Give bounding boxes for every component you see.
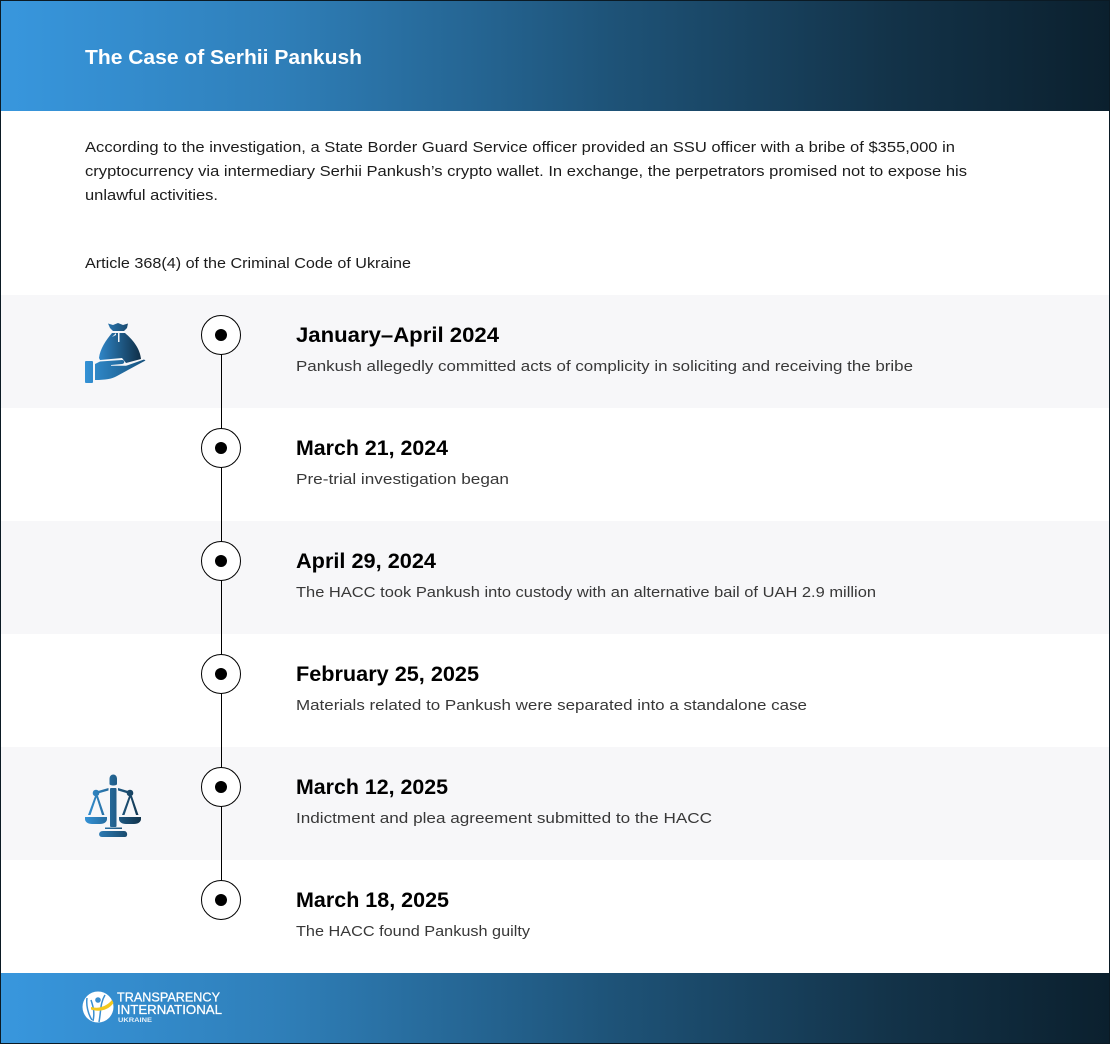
logo: Transparency International Ukraine: INTERNATIONAL [117, 1003, 222, 1017]
header band [0, 0, 1110, 111]
title: The Case of Serhii Pankush [85, 47, 362, 69]
event: March 12, 2025 [296, 776, 712, 827]
event: April 29, 2024: April 29, 2024 [296, 550, 436, 573]
icon: scales of justice [85, 774, 141, 837]
event: March 18, 2025: March 18, 2025 [296, 889, 449, 912]
event: April 29, 2024: The HACC took Pankush into custody with an alternative bail of UAH 2.9 million [296, 584, 876, 601]
event: March 21, 2024: March 21, 2024 [296, 437, 448, 460]
event: March 18, 2025: The HACC found Pankush guilty [296, 923, 531, 940]
event: January–April 2024: Pankush allegedly committed acts of complicity in soliciting and receiving the bribe [296, 358, 913, 375]
intro paragraph [85, 139, 967, 204]
event: February 25, 2025: February 25, 2025 [296, 663, 479, 686]
event: March 21, 2024: Pre-trial investigation began [296, 471, 509, 488]
intro paragraph: According to the investigation, a State Border Guard Service officer provided an SSU officer with a bribe of $355,000 in [85, 139, 955, 156]
timeline markers [202, 316, 240, 920]
event: March 12, 2025: March 12, 2025 [296, 776, 448, 799]
intro paragraph: unlawful activities. [85, 187, 218, 204]
event: March 12, 2025: Indictment and plea agreement submitted to the HACC [296, 810, 712, 827]
event: February 25, 2025: Materials related to Pankush were separated into a standalone case [296, 697, 807, 714]
logo: Transparency International Ukraine: TRANSPARENCY [117, 990, 221, 1004]
event: January–April 2024: January–April 2024 [296, 324, 499, 347]
event: April 29, 2024 [296, 550, 876, 601]
logo: Transparency International Ukraine [82, 990, 222, 1024]
footer band [0, 973, 1110, 1044]
event: January–April 2024 [296, 324, 913, 375]
legal article reference: Article 368(4) of the Criminal Code of Ukraine [85, 255, 411, 272]
logo: Transparency International Ukraine: UKRAINE [118, 1017, 153, 1024]
icon: money bag on hand [85, 323, 146, 383]
event: March 18, 2025 [296, 889, 531, 940]
timeline line [220, 335, 222, 900]
intro paragraph: cryptocurrency via intermediary Serhii Pankush’s crypto wallet. In exchange, the perpetrators promised not to expose his [85, 163, 967, 180]
event: February 25, 2025 [296, 663, 807, 714]
event: March 21, 2024 [296, 437, 509, 488]
alternating row backgrounds [0, 295, 1110, 860]
